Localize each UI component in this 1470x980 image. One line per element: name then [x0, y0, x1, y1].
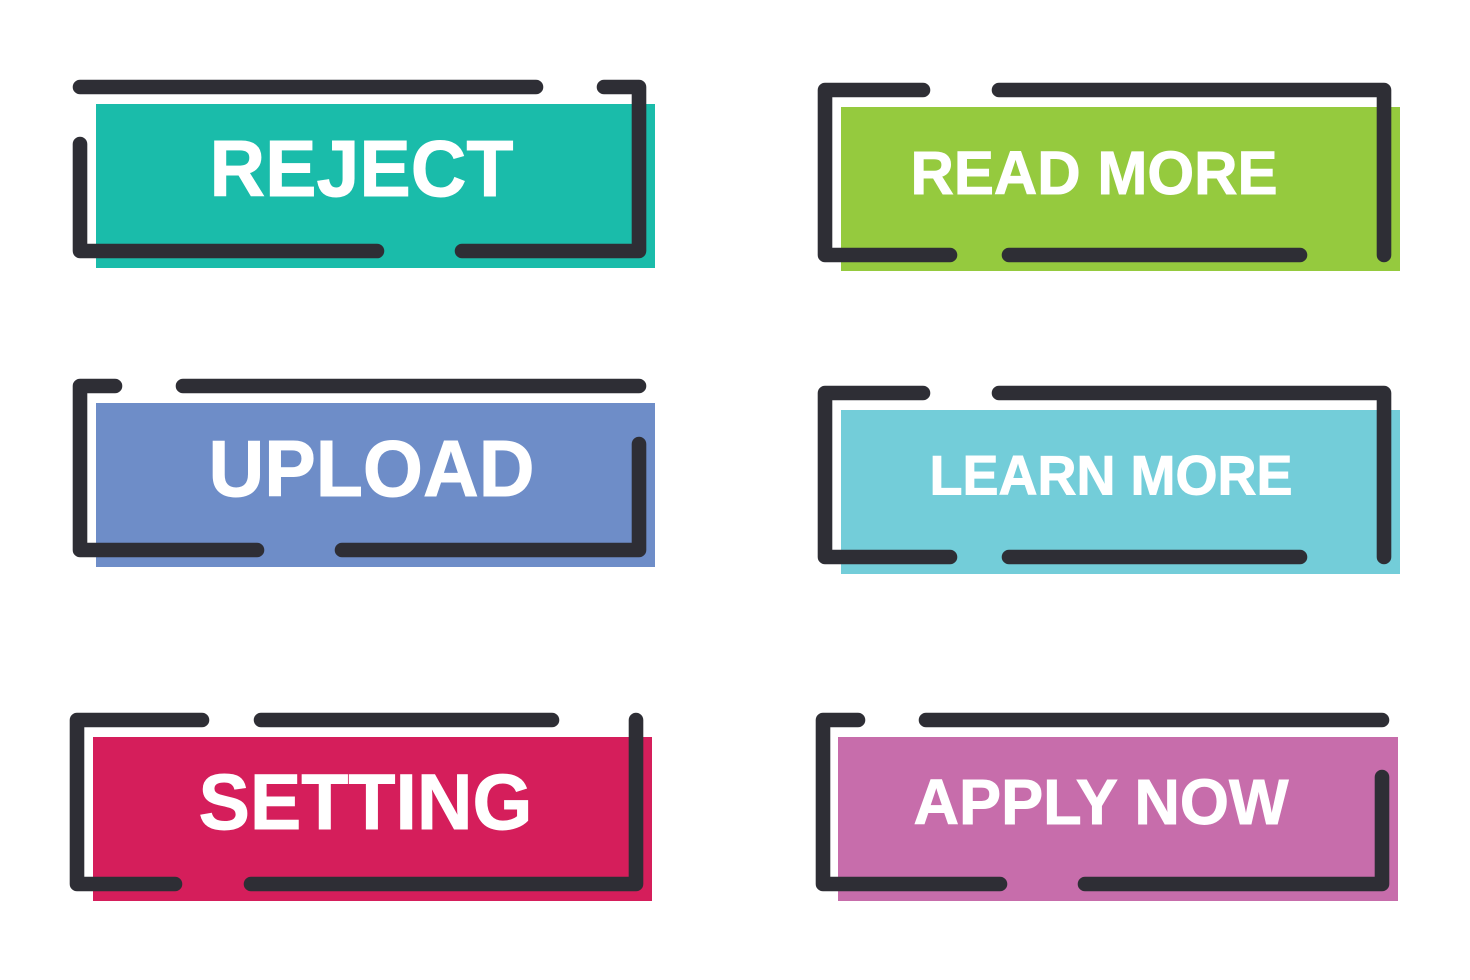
- label: apply now: APPLY NOW: [914, 766, 1289, 838]
- bracket outline: reject: [80, 87, 639, 251]
- button: learn more: [825, 393, 1400, 574]
- label: read more: READ MORE: [910, 139, 1278, 208]
- label: setting: SETTING: [198, 757, 532, 846]
- button: apply now: [823, 720, 1398, 901]
- bracket outline: upload: [80, 386, 639, 550]
- label: upload: UPLOAD: [208, 424, 534, 513]
- label: reject: REJECT: [210, 124, 514, 213]
- bracket outline: learn more: [825, 393, 1384, 557]
- button: upload: [80, 386, 655, 567]
- label: learn more: LEARN MORE: [930, 444, 1292, 506]
- button: setting: [77, 720, 652, 901]
- button: reject: [80, 87, 655, 268]
- bracket outline: apply now: [823, 720, 1382, 884]
- bracket outline: setting: [77, 720, 636, 884]
- bracket outline: read more: [825, 90, 1384, 255]
- button: read more: [825, 90, 1400, 271]
